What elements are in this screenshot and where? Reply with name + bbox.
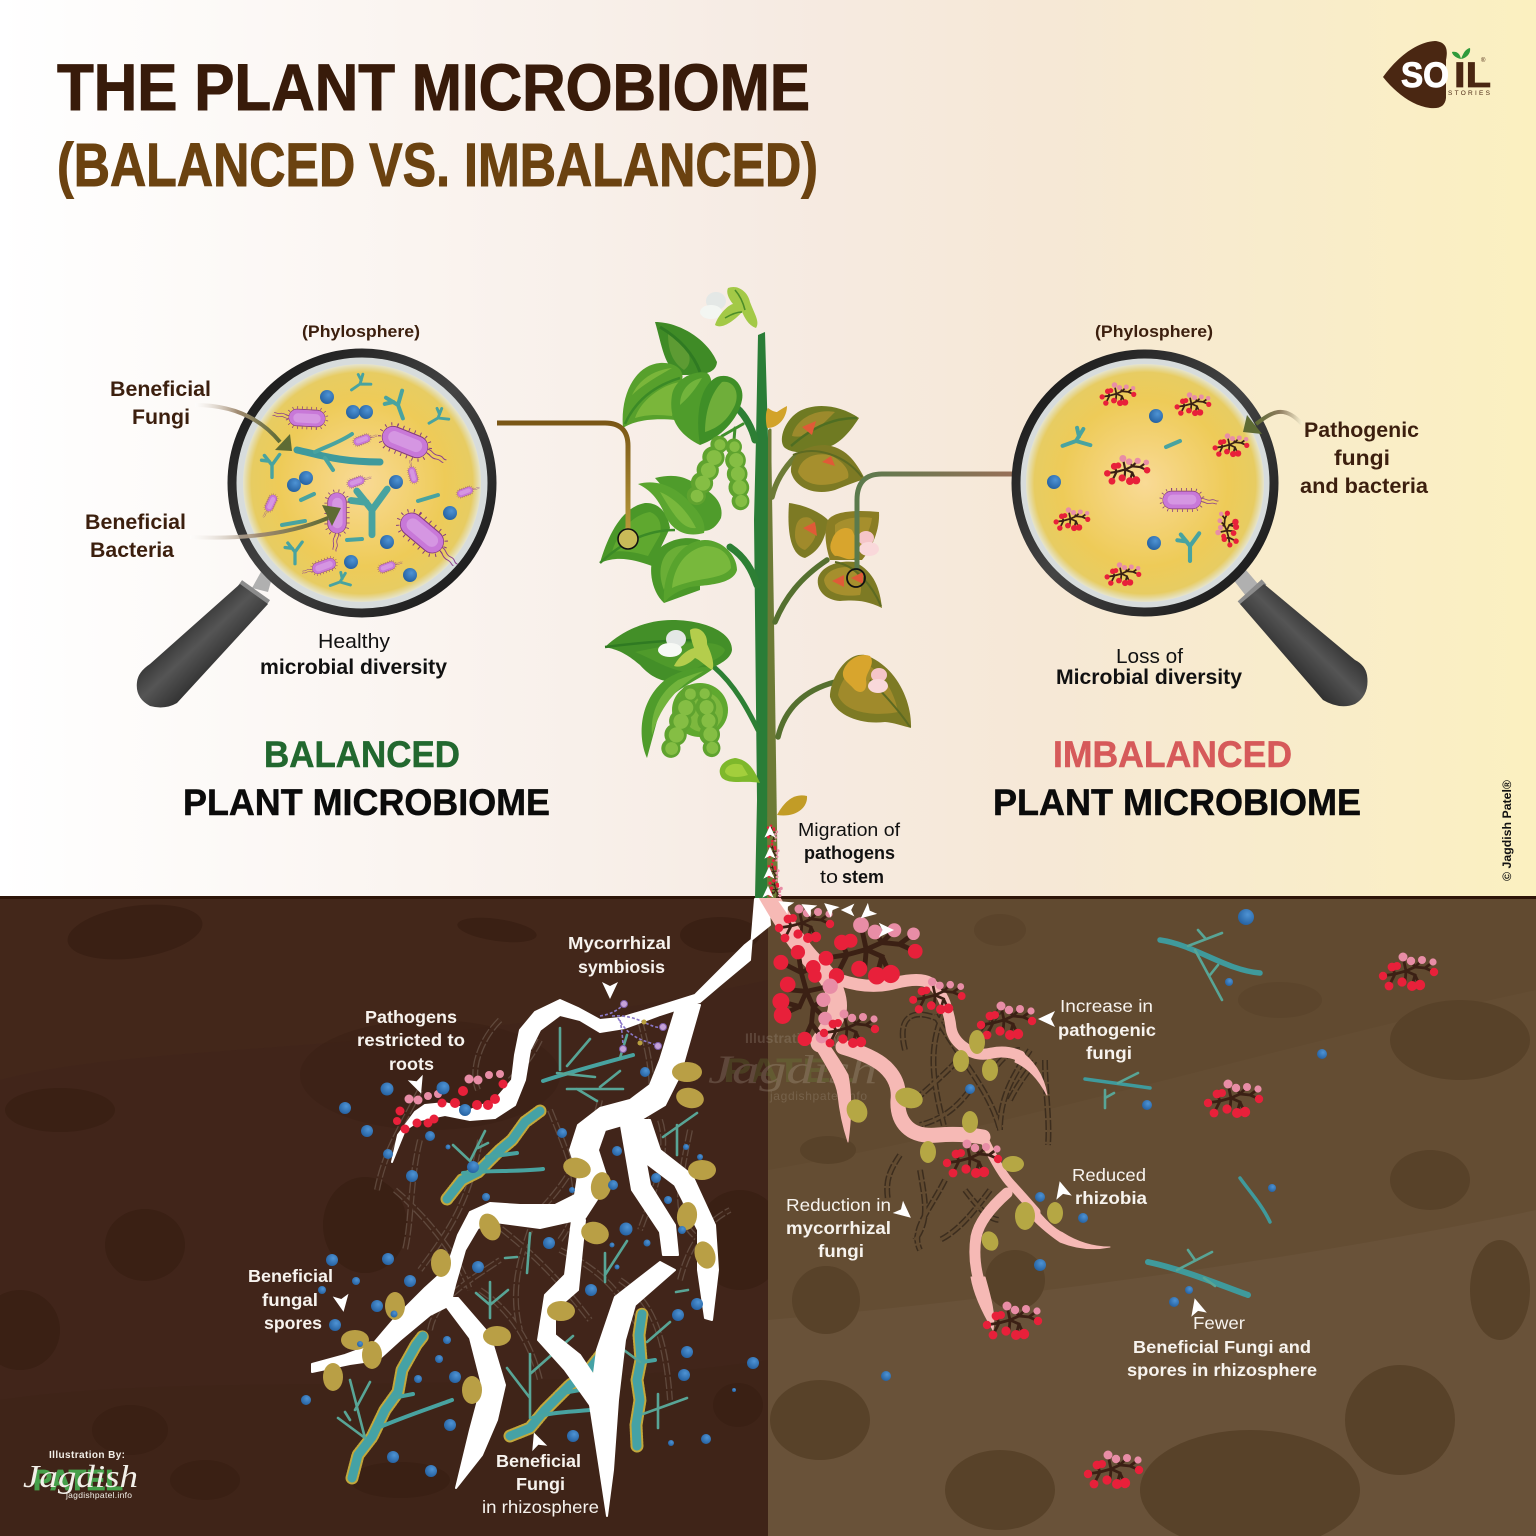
fungal spores: balanced bbox=[323, 1062, 719, 1404]
pathogens restricted to roots bbox=[393, 1070, 508, 1134]
label: mycorrhizal symbiosis: symbiosis bbox=[578, 957, 665, 977]
connector: healthy leaf to balanced lens bbox=[497, 423, 638, 549]
label: migration of pathogens to stem: to bbox=[820, 867, 838, 887]
label: beneficial fungal spores: Beneficial bbox=[248, 1266, 333, 1286]
logo: Soil Stories: IL bbox=[1454, 56, 1491, 95]
heading: balanced: BALANCED bbox=[264, 734, 460, 775]
connector: diseased leaf to imbalanced lens bbox=[847, 474, 1012, 587]
label: pathogenic fungi and bacteria: fungi bbox=[1334, 447, 1390, 470]
white pointer arrows bbox=[333, 895, 1207, 1451]
label: reduction in mycorrhizal fungi: Reduction in bbox=[786, 1195, 891, 1215]
pathogenic fungi clusters on roots bbox=[772, 904, 1042, 1340]
caption: loss of microbial diversity: Loss of bbox=[1116, 646, 1183, 668]
label: migration of pathogens to stem: pathogens bbox=[804, 843, 895, 863]
label: increase in pathogenic fungi: pathogenic bbox=[1058, 1020, 1156, 1040]
label: mycorrhizal symbiosis bbox=[568, 933, 671, 977]
label: migration of pathogens to stem: stem bbox=[842, 867, 884, 887]
heading: imbalanced bbox=[993, 734, 1361, 823]
label: beneficial fungi in rhizosphere: in rhizosphere bbox=[482, 1497, 599, 1517]
right root bbox=[632, 1120, 718, 1320]
label: pathogens restricted to roots: roots bbox=[389, 1054, 434, 1074]
logo: illustrator credit bbox=[23, 1450, 138, 1500]
label: reduction in mycorrhizal fungi: fungi bbox=[818, 1241, 864, 1261]
label: beneficial fungi: Fungi bbox=[132, 406, 190, 429]
label: fewer beneficial fungi and spores: spores in rhizosphere bbox=[1127, 1360, 1317, 1380]
label: reduction in mycorrhizal fungi bbox=[786, 1195, 891, 1261]
logo: Soil Stories: STORIES bbox=[1448, 90, 1491, 97]
icon: upper pink flower bbox=[830, 528, 879, 559]
rhizobia: imbalanced bbox=[881, 909, 1327, 1381]
watermark: Jagdish bbox=[708, 1047, 877, 1092]
heading: imbalanced: PLANT MICROBIOME bbox=[993, 782, 1361, 823]
main left root bbox=[312, 1005, 700, 1372]
arrow: beneficial fungi bbox=[195, 405, 292, 451]
label: beneficial bacteria: Beneficial bbox=[85, 511, 186, 534]
soil: balanced side bbox=[0, 897, 785, 1536]
white healthy roots bbox=[312, 899, 770, 1516]
arrow: beneficial bacteria bbox=[190, 505, 341, 538]
caption: healthy microbial diversity: Healthy bbox=[318, 631, 390, 653]
loop root bbox=[538, 1220, 600, 1405]
label: pathogens restricted to roots: restricted to bbox=[357, 1030, 465, 1050]
upper root with pathogen tip bbox=[392, 899, 770, 1162]
label: beneficial fungi in rhizosphere bbox=[482, 1451, 599, 1517]
label: reduction in mycorrhizal fungi: mycorrhizal bbox=[786, 1218, 891, 1238]
olive leaves bbox=[766, 406, 911, 816]
label: beneficial fungal spores bbox=[248, 1266, 333, 1333]
soil: imbalanced side bbox=[768, 898, 1536, 1536]
label: beneficial fungal spores: spores bbox=[264, 1313, 322, 1333]
green leaves: lower group bbox=[605, 620, 760, 783]
background bbox=[0, 0, 1536, 900]
panel: balanced magnifier bbox=[137, 353, 492, 707]
label: beneficial fungal spores: fungal bbox=[262, 1290, 318, 1310]
inner root bbox=[620, 1120, 678, 1255]
pink diseased roots bbox=[768, 895, 1110, 1330]
label: pathogenic fungi and bacteria: and bacteria bbox=[1300, 475, 1428, 498]
heading: balanced bbox=[183, 734, 550, 823]
label: beneficial fungi bbox=[110, 378, 211, 429]
label: increase in pathogenic fungi: Increase in bbox=[1060, 996, 1153, 1016]
logo: illustrator credit: Illustration By: bbox=[49, 1450, 125, 1461]
credit: copyright: © Jagdish Patel® bbox=[1502, 779, 1514, 881]
caption: loss of microbial diversity bbox=[1056, 646, 1242, 689]
label: increase in pathogenic fungi bbox=[1058, 996, 1156, 1063]
heading: imbalanced: IMBALANCED bbox=[1053, 734, 1292, 775]
logo: Soil Stories: ® bbox=[1481, 57, 1486, 64]
background hyphae: imbalanced soil bbox=[887, 1010, 1048, 1250]
watermark: jagdishpatel.info bbox=[769, 1089, 867, 1103]
label: pathogenic fungi and bacteria bbox=[1300, 419, 1428, 498]
label: migration of pathogens to stem bbox=[798, 820, 901, 887]
left lens microbes bbox=[260, 372, 481, 592]
watermark bbox=[708, 1030, 877, 1103]
label: beneficial bacteria bbox=[85, 511, 186, 562]
label: reduced rhizobia: Reduced bbox=[1072, 1165, 1146, 1185]
label: fewer beneficial fungi and spores: Fewer bbox=[1193, 1313, 1245, 1333]
stem bbox=[754, 332, 778, 898]
label: pathogenic fungi and bacteria: Pathogenic bbox=[1304, 419, 1419, 442]
icon: right magnifier handle bbox=[1232, 570, 1368, 706]
label: fewer beneficial fungi and spores bbox=[1127, 1313, 1317, 1380]
title bbox=[57, 50, 818, 199]
beneficial fungi: imbalanced soil bbox=[1085, 930, 1270, 1295]
caption: loss of microbial diversity: Microbial diversity bbox=[1056, 666, 1242, 689]
right lens microbes bbox=[1047, 382, 1249, 586]
label: beneficial fungi in rhizosphere: Beneficial bbox=[496, 1451, 581, 1471]
label: pathogens restricted to roots: Pathogens bbox=[365, 1007, 457, 1027]
plant bbox=[600, 287, 911, 902]
pods bbox=[657, 432, 752, 761]
icon: lower white flower bbox=[658, 628, 713, 670]
fungal spores: imbalanced bbox=[843, 1030, 1063, 1253]
label: increase in pathogenic fungi: fungi bbox=[1086, 1043, 1132, 1063]
label: reduced rhizobia bbox=[1072, 1165, 1147, 1208]
label: Phylosphere (balanced): (Phylosphere) bbox=[302, 323, 420, 341]
green leaves: middle group bbox=[600, 476, 737, 603]
logo: Soil Stories: SO bbox=[1401, 56, 1449, 95]
pathogenic fungi clusters in soil bbox=[1084, 952, 1438, 1489]
panel: imbalanced magnifier bbox=[1016, 354, 1368, 706]
arrow: pathogenic fungi bbox=[1243, 412, 1302, 434]
icon: lower pink flower bbox=[843, 655, 888, 693]
logo: illustrator credit: jagdishpatel.info bbox=[65, 1490, 132, 1500]
rhizobia: balanced bbox=[301, 1067, 759, 1477]
migrating pathogens on stem bbox=[762, 825, 783, 902]
icon: top white flower bbox=[700, 287, 757, 328]
heading: balanced: PLANT MICROBIOME bbox=[183, 782, 550, 823]
green leaves: upper group bbox=[623, 322, 742, 445]
icon: left magnifier handle bbox=[137, 570, 272, 707]
label: beneficial fungi: Beneficial bbox=[110, 378, 211, 401]
branches bbox=[714, 408, 835, 737]
label: mycorrhizal symbiosis: Mycorrhizal bbox=[568, 933, 671, 953]
beneficial teal fungi bbox=[338, 1028, 697, 1478]
watermark: Illustration By bbox=[745, 1030, 840, 1046]
label: Phylosphere (imbalanced): (Phylosphere) bbox=[1095, 323, 1213, 341]
long root bbox=[590, 1262, 675, 1516]
logo: illustrator credit: Jagdish bbox=[23, 1458, 138, 1494]
label: beneficial bacteria: Bacteria bbox=[90, 539, 174, 562]
label: fewer beneficial fungi and spores: Beneficial Fungi and bbox=[1133, 1337, 1311, 1357]
logo: illustrator credit: PATEL bbox=[33, 1465, 123, 1497]
label: migration of pathogens to stem: Migration of bbox=[798, 820, 901, 840]
title: THE PLANT MICROBIOME bbox=[57, 50, 810, 124]
tip root bbox=[440, 1298, 505, 1488]
logo: Soil Stories bbox=[1383, 41, 1491, 108]
label: pathogens restricted to roots bbox=[357, 1007, 465, 1074]
watermark: PATEL bbox=[723, 1052, 857, 1090]
title: (BALANCED VS. IMBALANCED) bbox=[57, 131, 818, 199]
caption: healthy microbial diversity bbox=[260, 631, 447, 679]
background hyphae: balanced soil bbox=[377, 1020, 730, 1400]
mycorrhizal symbiosis bbox=[600, 1000, 666, 1052]
flowers bbox=[658, 287, 888, 693]
label: beneficial fungi in rhizosphere: Fungi bbox=[516, 1474, 565, 1494]
label: reduced rhizobia: rhizobia bbox=[1075, 1188, 1147, 1208]
caption: healthy microbial diversity: microbial diversity bbox=[260, 656, 447, 679]
